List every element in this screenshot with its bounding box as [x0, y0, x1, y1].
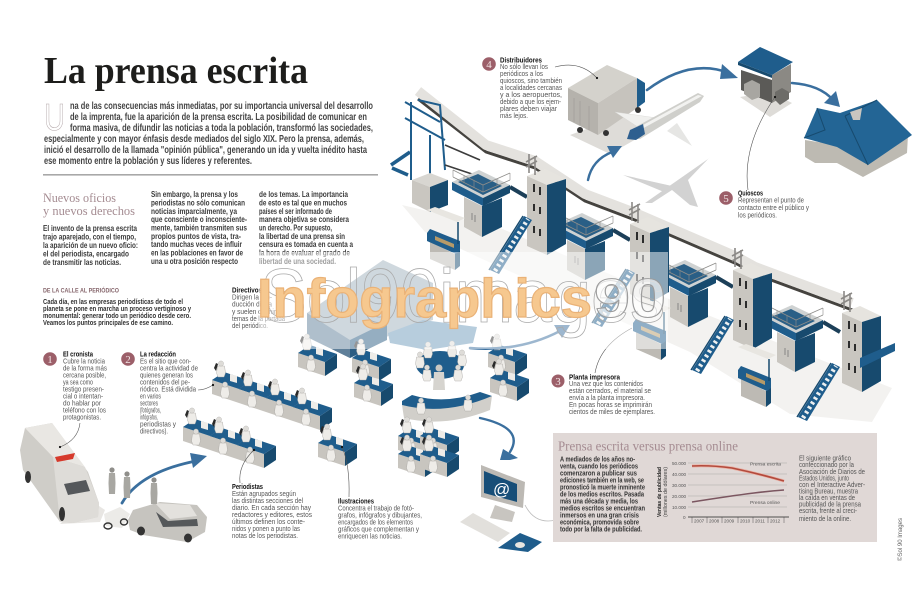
callout: ilustraciones: Concentra el trabajo de fotó-	[338, 504, 414, 512]
control consoles	[427, 207, 465, 270]
side platform	[860, 343, 895, 368]
y axis labels	[672, 461, 686, 520]
column 1 text	[43, 224, 138, 267]
column 3 text: censura es tomada en cuenta a	[259, 240, 353, 249]
illustration: car	[128, 502, 207, 542]
column 3 text: la hora de evaluar el grado de	[259, 248, 350, 258]
y axis labels: 50.000	[672, 461, 686, 466]
column 2 text: una u otra posición respecto	[151, 257, 238, 266]
callout: periodistas	[232, 482, 312, 540]
callout: periodistas: redactores y editores, estos	[232, 510, 312, 519]
callout 1: el cronista: cial o intentan-	[63, 392, 104, 400]
column 2 text: noticias imparcialmente, ya	[151, 207, 237, 216]
column 1 text: El invento de la prensa escrita	[43, 224, 137, 233]
column 2 text: propios puntos de vista, tra-	[151, 232, 241, 241]
arrow: street to newsroom	[122, 453, 207, 503]
left frame	[391, 100, 490, 180]
illustration: kiosk	[738, 47, 793, 117]
panel left text: A mediados de los años no-	[560, 454, 635, 464]
column 2 text	[151, 190, 247, 266]
callout: ilustraciones: encargados de los elementos	[338, 518, 413, 526]
callout 3: planta impresora	[552, 372, 655, 416]
panel left text	[560, 454, 645, 534]
callout 1: el cronista: protagonistas.	[63, 412, 101, 422]
callout 1: el cronista: El cronista	[63, 350, 94, 358]
callout 4: distribuidores: y a los aeropuertos,	[500, 90, 562, 99]
callout 5: quioscos	[719, 188, 809, 220]
callout: periodistas: últimos definen los conte-	[232, 517, 306, 526]
callout 2: la redacción	[121, 350, 198, 436]
callout: ilustraciones: enriquecen las noticias.	[338, 532, 402, 540]
callout: directivos: y suelen definir	[232, 307, 277, 316]
callout: directivos: temas de la portada	[232, 314, 285, 323]
callout 1: el cronista: do hablar por	[63, 398, 102, 408]
callout 2: la redacción: periodistas y	[140, 420, 176, 428]
section intro: de la calle al periódico: Cada día, en las empresas periodísticas de todo el	[43, 297, 183, 306]
callout: directivos: Directivos	[232, 286, 262, 294]
callout: periodistas: diario. En cada sección hay	[232, 503, 311, 512]
panel left text: todo por la falta de publicidad.	[560, 524, 642, 534]
column 2 text: en las poblaciones en favor de	[151, 248, 243, 258]
panel left text: más una década y media, los	[560, 496, 638, 506]
illustration: van	[20, 423, 105, 524]
intro text: de la imprenta, fue la aparición de la prensa escrita. La posibilidad de comunicar en	[70, 112, 367, 123]
panel right text: confeccionado por la	[799, 460, 854, 469]
callout: ilustraciones: gráficos que complementan y	[338, 524, 419, 534]
panel left text: inmersos en una gran crisis	[560, 510, 639, 520]
panel right text: escrita, frente al creci-	[799, 506, 857, 515]
section intro: de la calle al periódico: monumental: generar todo un periódico desde cero.	[43, 311, 191, 320]
callout 4: distribuidores: plares deben viajar	[500, 104, 558, 113]
callout: periodistas: nidos y ponen a punto las	[232, 524, 300, 533]
arrow: kiosk to house	[792, 83, 840, 107]
illustration: house	[804, 100, 912, 177]
callout 4: distribuidores: Distribuidores	[500, 56, 542, 64]
callout 3: planta impresora: Una vez que los contenidos	[569, 379, 643, 388]
panel right text	[799, 454, 866, 523]
stairs	[489, 216, 532, 274]
drop cap: U	[44, 97, 65, 139]
callout: directivos: Dirigen la pro-	[232, 292, 273, 302]
column 1 text: la aparición de un nuevo oficio:	[43, 241, 138, 250]
column 1 text: trajo aparejado, con el tiempo,	[43, 232, 136, 242]
y axis labels: 10.000	[672, 505, 686, 510]
callout 5: quioscos: Representan el punto de	[738, 196, 804, 204]
heading: nuevos oficios: Nuevos oficios	[43, 190, 116, 205]
leader dots	[59, 77, 776, 451]
intro text: ese momento entre la población y sus líderes y referentes.	[44, 156, 252, 167]
column 3 text: de esto es tal que en muchos	[259, 198, 347, 207]
x axis labels: 2011	[755, 518, 765, 524]
arrow: newsroom to computer	[480, 418, 518, 460]
callout: periodistas: Están agrupados según	[232, 489, 296, 498]
arrow: plant to plane	[588, 146, 622, 180]
callout 2: la redacción: en varios	[140, 392, 161, 400]
x axis labels: 2007	[694, 518, 705, 524]
section intro: de la calle al periódico: Veamos los puntos principales de ese camino.	[43, 318, 173, 327]
callout: directivos: ducción diaria	[232, 300, 272, 308]
column 1 text: el del periodista, encargado	[43, 250, 129, 258]
callout: periodistas: Periodistas	[232, 482, 263, 491]
callout 2: la redacción: centra la actividad de	[140, 364, 198, 372]
round table	[416, 341, 466, 390]
callout 2: la redacción: (fotógrafos,	[140, 406, 161, 414]
callout 2: la redacción: infógrafos,	[140, 412, 158, 422]
callout 4: distribuidores: periódicos a los	[500, 69, 543, 78]
cabinets and platforms	[452, 170, 527, 237]
heading: nuevos oficios: y nuevos derechos	[43, 203, 135, 218]
axis title: Ventas de publicidad	[657, 466, 663, 517]
directors office	[307, 260, 477, 358]
callout 2: la redacción: riódico. Está dividida	[140, 384, 196, 394]
panel right text: tising Bureau, muestra	[799, 486, 858, 496]
conveyor belt	[418, 91, 855, 311]
illustration: truck	[568, 65, 652, 154]
column 2 text: mente, también transmiten sus	[151, 224, 247, 232]
column 2 text: periodistas no sólo comunican	[151, 198, 245, 207]
illustration: printing plant	[391, 91, 895, 421]
y axis labels: 40.000	[672, 472, 686, 477]
callout 1: el cronista: de la forma más	[63, 364, 107, 372]
column 3 text: libertad de una sociedad.	[259, 257, 336, 266]
title: La prensa escrita	[44, 50, 308, 92]
callout: ilustraciones: Ilustraciones	[338, 496, 374, 506]
panel left text: pronosticó la muerte inminente	[560, 482, 645, 492]
y axis labels: 20.000	[672, 494, 686, 499]
badge 2: 2	[125, 354, 131, 366]
column 2 text: Sin embargo, la prensa y los	[151, 190, 238, 199]
callout 4: distribuidores: debido a que los ejem-	[500, 97, 561, 106]
column 3 text: la libertad de una prensa sin	[259, 232, 345, 241]
intro text: forma masiva, de difundir las noticias a toda la población, transformó las sociedades,	[70, 123, 373, 134]
watermark: Infographics	[257, 267, 592, 329]
section intro: de la calle al periódico: DE LA CALLE AL PERIÓDICO	[43, 286, 119, 294]
panel left text: comenzaron a publicar sus	[560, 468, 637, 478]
callout 2: la redacción: sectores	[140, 398, 158, 408]
watermark: 90	[594, 267, 666, 329]
series labels: Prensa escrita	[750, 462, 781, 466]
arc desk	[402, 392, 492, 422]
panel left text: medios escritos se encuentran	[560, 504, 645, 512]
left base	[412, 173, 448, 212]
intro text	[44, 101, 373, 167]
x axis labels: 2009	[724, 518, 735, 524]
plane shadow	[623, 157, 710, 207]
illustration: motorcycle	[104, 507, 130, 529]
callout: ilustraciones	[338, 496, 422, 540]
callout 3: planta impresora: cientos de miles de ejemplares.	[569, 407, 655, 416]
badge 5: 5	[723, 193, 729, 205]
callout 5: quioscos: contacto entre el público y	[738, 203, 809, 212]
column 3 text: manera objetiva se considera	[259, 215, 349, 224]
copyright: ©Sol 90 Images	[897, 518, 904, 561]
series: prensa escrita	[692, 466, 784, 481]
illustration: airplane	[615, 93, 704, 146]
factory shadow	[402, 205, 892, 422]
illustration: computer: @	[493, 480, 510, 499]
panel right text: miento de la online.	[799, 514, 851, 523]
callout 1: el cronista: cercana posible,	[63, 370, 106, 380]
column 3 text: de los temas. La importancia	[259, 190, 348, 199]
panel heading: Prensa escrita versus prensa online	[558, 440, 738, 454]
callout: ilustraciones: grafos, infógrafos y dibujantes,	[338, 510, 422, 520]
axis title	[657, 466, 669, 517]
callout 3: planta impresora: están cerrados, el material se	[569, 386, 651, 395]
printing towers	[526, 154, 566, 255]
callout 1: el cronista: testigo presen-	[63, 384, 105, 394]
column 2 text: tando muchas veces de influir	[151, 240, 243, 249]
callout 2: la redacción: quienes generan los	[140, 370, 193, 380]
intro text: especialmente y con mayor énfasis desde mediados del siglo XIX. Pero la prensa, además,	[44, 134, 364, 145]
desk rows	[212, 361, 251, 403]
intro text: na de las consecuencias más inmediatas, por su importancia universal del desarrollo	[70, 101, 373, 112]
column 1 text: de transmitir las noticias.	[43, 258, 121, 267]
y axis labels: 30.000	[672, 483, 686, 488]
line chart: Prensa online	[750, 500, 780, 505]
intro text: inició el desarrollo de la llamada "opinión pública", generando un ida y vuelta inédito hasta	[44, 145, 367, 156]
panel left text: venta, cuando los periódicos	[560, 462, 638, 470]
callout 2: la redacción: directivos).	[140, 426, 168, 436]
axis title: (millones de dólares)	[663, 467, 669, 517]
section intro: de la calle al periódico: planeta se pone en marcha un proceso vertiginoso y	[43, 304, 191, 313]
x axis labels: 2012	[770, 518, 781, 524]
column 2 text: que consciente o inconsciente-	[151, 215, 247, 224]
panel right text: publicidad de la prensa	[799, 500, 861, 508]
callout 2: la redacción: La redacción	[140, 350, 176, 358]
callout 1: el cronista	[43, 350, 107, 422]
series: prensa online	[692, 490, 784, 502]
arrow: newsroom to printing plant	[470, 325, 570, 349]
x axis labels	[692, 517, 784, 524]
panel: prensa escrita versus prensa online	[553, 433, 877, 542]
callout: periodistas: las distintas secciones del	[232, 496, 303, 505]
column 3 text: un derecho. Por supuesto,	[259, 224, 332, 232]
badge 4: 4	[486, 59, 492, 71]
panel right text: Estados Unidos, junto	[799, 474, 849, 483]
panel right text: la caída en ventas de	[799, 493, 855, 502]
y axis labels: 0	[683, 515, 686, 520]
badge 3: 3	[555, 376, 561, 388]
square desk group	[398, 417, 437, 459]
section intro: de la calle al periódico	[43, 286, 191, 327]
heading: nuevos oficios	[43, 190, 135, 218]
leader lines	[60, 65, 775, 497]
panel right text: El siguiente gráfico	[799, 454, 851, 462]
callout: directivos	[232, 286, 285, 330]
callout 3: planta impresora: En pocas horas se imprimirán	[569, 400, 652, 409]
panel right text: Asociación de Diarios de	[799, 467, 865, 476]
line chart	[657, 461, 789, 524]
watermark: Sol90images	[260, 254, 665, 339]
illustration: people on the street	[108, 467, 158, 504]
callout 4: distribuidores: No sólo llevan los	[500, 62, 548, 71]
x axis labels: 2008	[709, 518, 720, 524]
callout 4: distribuidores: quioscos, sino también	[500, 76, 562, 85]
column 3 text: países el ser informado de	[259, 207, 332, 216]
panel left text: ediciones también en la web, se	[560, 476, 644, 484]
callout 1: el cronista: teléfono con los	[63, 406, 106, 414]
callout 1: el cronista: ya sea como	[63, 378, 93, 386]
badge 1: 1	[47, 354, 53, 366]
callout 4: distribuidores: más lejos.	[500, 111, 528, 120]
illustration: newsroom	[183, 260, 529, 477]
callout 4: distribuidores: a localidades cercanas	[500, 83, 562, 92]
callout 3: planta impresora: Planta impresora	[569, 372, 621, 382]
column 3 text	[259, 190, 353, 266]
panel left text: económica, promovida sobre	[560, 518, 639, 526]
callout 4: distribuidores	[482, 56, 562, 120]
callout 2: la redacción: contenidos del pe-	[140, 378, 191, 386]
panel left text: de los medios escritos. Pasada	[560, 490, 645, 498]
panel right text: con el Interactive Adver-	[799, 480, 866, 489]
callout 1: el cronista: Cubre la noticia	[63, 356, 105, 366]
callout: directivos: del periódico.	[232, 321, 268, 330]
arrow: truck to kiosk	[647, 64, 738, 90]
x axis labels: 2010	[740, 518, 751, 524]
callout: periodistas: notas de los periodistas.	[232, 531, 298, 540]
illustration: computer	[460, 465, 556, 552]
callout 2: la redacción: Es el sitio que con-	[140, 356, 192, 366]
callout 3: planta impresora: envía a la planta impresora.	[569, 393, 645, 402]
callout 5: quioscos: los periódicos.	[738, 210, 777, 220]
callout 5: quioscos: Quioscos	[738, 188, 763, 198]
